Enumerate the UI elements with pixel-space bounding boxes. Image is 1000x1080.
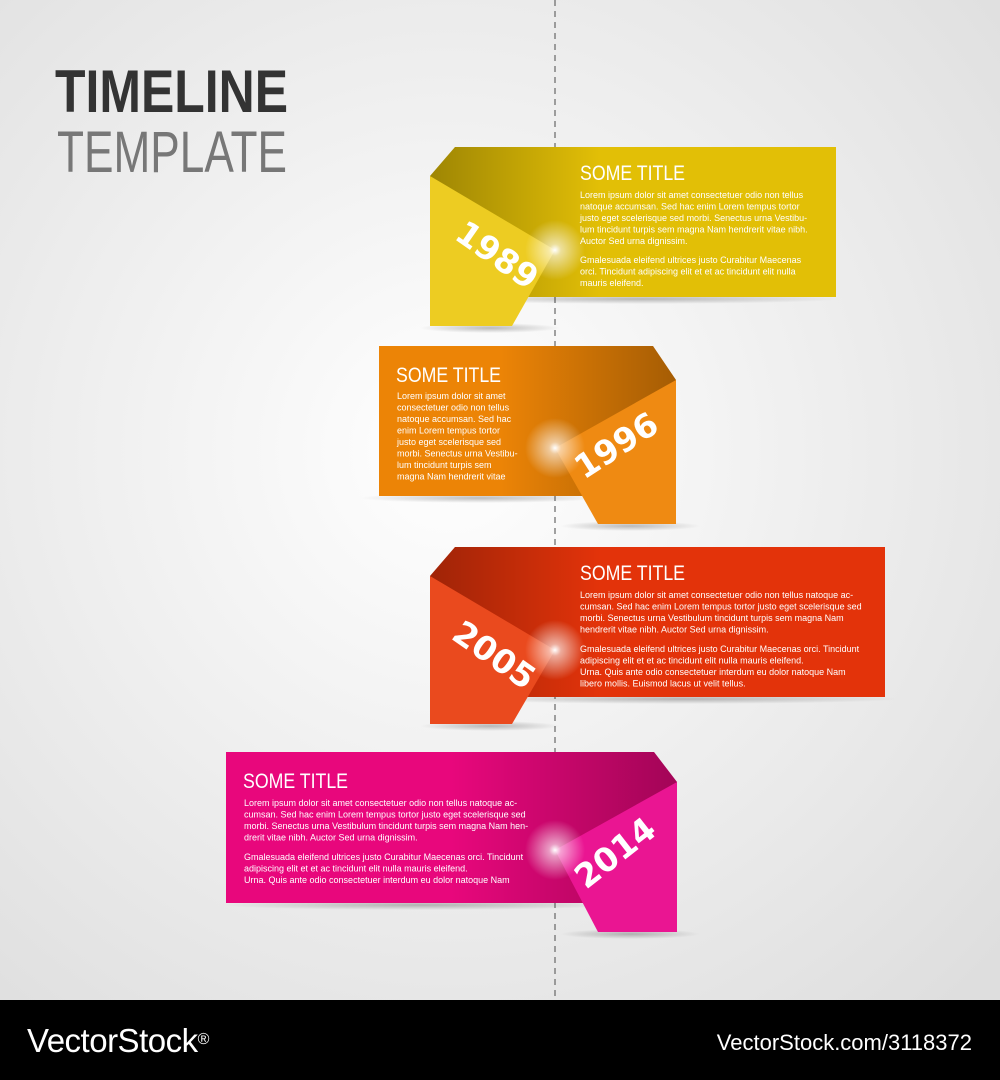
card 1989	[420, 147, 840, 333]
card 2005: cumsan. Sed hac enim Lorem tempus tortor justo eget scelerisque sed	[580, 602, 862, 612]
card 2005: Urna. Quis ante odio consectetuer interdum eu dolor natoque Nam	[580, 667, 846, 677]
card 2005: adipiscing elit et et ac tincidunt elit nulla mauris eleifend.	[580, 656, 804, 666]
card 1996: magna Nam hendrerit vitae	[397, 472, 506, 482]
card 1996: Lorem ipsum dolor sit amet	[397, 391, 506, 401]
card 2005: SOME TITLE	[580, 562, 685, 585]
footer bar: VectorStock.com/3118372	[717, 1030, 972, 1055]
title: TEMPLATE	[57, 120, 287, 185]
card 1996: natoque accumsan. Sed hac	[397, 414, 512, 424]
card 2005: morbi. Senectus urna Vestibulum tincidunt turpis sem magna Nam	[580, 613, 844, 623]
card 2014: cumsan. Sed hac enim Lorem tempus tortor justo eget scelerisque sed	[244, 810, 526, 820]
card 2014: drerit vitae nibh. Auctor Sed urna dignissim.	[244, 832, 418, 842]
footer bar	[0, 1000, 1000, 1080]
footer bar: VectorStock®	[27, 1022, 210, 1059]
card 2005: hendrerit vitae nibh. Auctor Sed urna dignissim.	[580, 624, 769, 634]
card 1989: mauris eleifend.	[580, 278, 644, 288]
card 2014: Gmalesuada eleifend ultrices justo Curabitur Maecenas orci. Tincidunt	[244, 852, 524, 862]
card 1989: Lorem ipsum dolor sit amet consectetuer odio non tellus	[580, 190, 804, 200]
card 1996: consectetuer odio non tellus	[397, 402, 510, 412]
card 1989: justo eget scelerisque sed morbi. Senectus urna Vestibu-	[579, 213, 807, 223]
card 2014: adipiscing elit et et ac tincidunt elit nulla mauris eleifend.	[244, 864, 468, 874]
title: TIMELINE	[55, 58, 288, 125]
card 1996: morbi. Senectus urna Vestibu-	[397, 448, 518, 458]
card 2005: libero mollis. Euismod lacus ut velit tellus.	[580, 678, 746, 688]
card 1989: SOME TITLE	[580, 162, 685, 185]
card 2005: 2005	[445, 613, 543, 697]
card 1989: 1989	[448, 213, 546, 297]
card 1989: lum tincidunt turpis sem magna Nam hendrerit vitae nibh.	[580, 224, 808, 234]
card 1989: natoque accumsan. Sed hac enim Lorem tempus tortor	[580, 202, 800, 212]
card 2014: 2014	[567, 809, 663, 896]
card 1996: enim Lorem tempus tortor	[397, 426, 500, 436]
card 1989: orci. Tincidunt adipiscing elit et et ac tincidunt elit nulla	[580, 266, 796, 276]
card 1996: justo eget scelerisque sed	[396, 437, 501, 447]
card 2005	[420, 547, 900, 731]
card 1996	[360, 346, 700, 531]
timeline dashed line	[554, 0, 556, 1000]
title	[55, 58, 288, 185]
card 2014: morbi. Senectus urna Vestibulum tincidunt turpis sem magna Nam hen-	[244, 821, 528, 831]
card 1996: lum tincidunt turpis sem	[397, 460, 492, 470]
card 2005: Gmalesuada eleifend ultrices justo Curabitur Maecenas orci. Tincidunt	[580, 644, 860, 654]
card 1989: Auctor Sed urna dignissim.	[580, 236, 688, 246]
card 2005: Lorem ipsum dolor sit amet consectetuer odio non tellus natoque ac-	[580, 590, 853, 600]
card 1989: Gmalesuada eleifend ultrices justo Curabitur Maecenas	[580, 255, 802, 265]
card 1996: 1996	[567, 404, 665, 487]
card 1996: SOME TITLE	[396, 364, 501, 387]
card 2014: Urna. Quis ante odio consectetuer interdum eu dolor natoque Nam	[244, 875, 510, 885]
card 2014: Lorem ipsum dolor sit amet consectetuer odio non tellus natoque ac-	[244, 798, 517, 808]
card 2014	[220, 752, 700, 939]
card 2014: SOME TITLE	[243, 770, 348, 793]
